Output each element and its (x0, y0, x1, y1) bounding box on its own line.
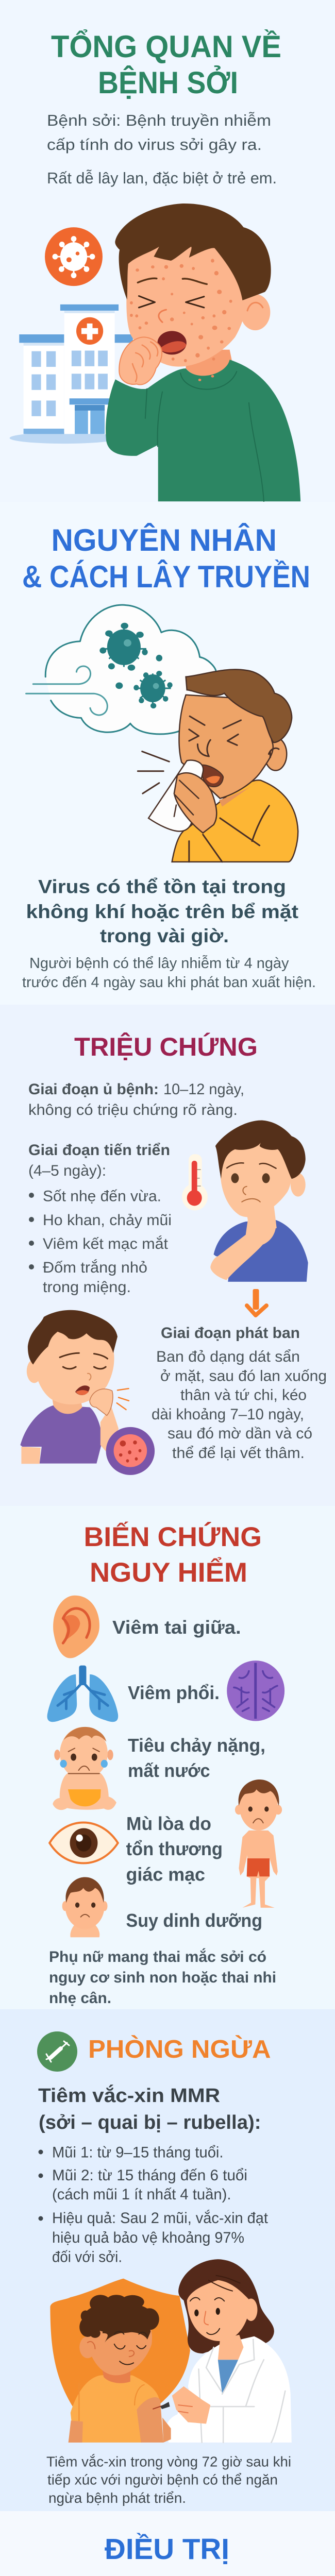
text: contagious period (22, 955, 316, 991)
text: virus survival: không khí hoặc trên bể mặt (26, 901, 298, 922)
text: post-exposure note: Tiêm vắc-xin trong vòng 72 giờ sau khi (46, 2453, 291, 2470)
text: pregnancy note: Phụ nữ mang thai mắc sởi có (49, 1948, 266, 1965)
illustration: boy with sore throat (210, 1121, 308, 1282)
label: diarrhea: Tiêu chảy nặng, (128, 1735, 265, 1756)
text: rash stage: sau đó mờ dần và có (167, 1425, 312, 1442)
text: vaccine heading: (sởi – quai bị – rubella): (39, 2112, 261, 2133)
nurse hand with syringe (153, 2386, 210, 2424)
title: complications: BIẾN CHỨNG (83, 1521, 262, 1552)
icon: ear (53, 1596, 99, 1658)
text: definition: Rất dễ lây lan, đặc biệt ở trẻ em. (47, 169, 277, 187)
icon: crying baby (53, 1727, 116, 1810)
text: incubation stage: 10–12 ngày, (163, 1081, 244, 1098)
illustration: hospital (10, 304, 133, 444)
text: rash stage (152, 1325, 327, 1462)
text: virus survival (26, 876, 298, 946)
boy being vaccinated (69, 2295, 171, 2443)
text: progression stage: Viêm kết mạc mắt (43, 1235, 169, 1252)
text: vaccine heading: Tiêm vắc-xin MMR (38, 2084, 220, 2107)
text: progression stage: Ho khan, chảy mũi (43, 1212, 172, 1229)
text: definition (47, 111, 277, 187)
text: rash stage: Giai đoạn phát ban (161, 1325, 300, 1342)
text: progression stage: trong miệng. (43, 1279, 131, 1296)
label: blindness: giác mạc (126, 1864, 205, 1885)
text: vaccine heading (38, 2084, 261, 2133)
label: pneumonia: Viêm phổi. (128, 1682, 220, 1703)
text: post-exposure note: tiếp xúc với người bệnh có thể ngăn (47, 2472, 278, 2488)
text: vaccine schedule list: hiệu quả bảo vệ khoảng 97% (52, 2229, 244, 2246)
icon: arrow down (247, 1289, 266, 1315)
illustration: coughing boy with rash closeup (20, 1310, 155, 1475)
text: vaccine schedule list: Mũi 1: từ 9–15 tháng tuổi. (52, 2144, 224, 2161)
text: pregnancy note: nhẹ cân. (49, 1990, 111, 2007)
title: complications (83, 1521, 262, 1588)
text: rash stage: thân và tứ chi, kéo (180, 1387, 307, 1403)
text: incubation stage: Giai đoạn ủ bệnh: (28, 1081, 159, 1098)
icon: lungs (47, 1666, 118, 1722)
text: progression stage: Giai đoạn tiến triển (28, 1142, 170, 1159)
panel: complications (47, 1521, 284, 2007)
icon: eye (49, 1822, 118, 1863)
label: diarrhea (128, 1735, 265, 1781)
illustration: coughing boy with rash (106, 204, 300, 501)
panel: overview (9, 29, 301, 502)
label: malnutrition: Suy dinh dưỡng (126, 1910, 262, 1931)
text: vaccine schedule list: Mũi 2: từ 15 tháng đến 6 tuổi (52, 2167, 247, 2184)
title: complications: NGUY HIỂM (90, 1557, 247, 1588)
title: overview (51, 29, 281, 100)
text: virus survival: Virus có thể tồn tại trong (38, 876, 286, 897)
illustration: virus cloud (26, 605, 216, 734)
panel: symptoms (20, 1032, 327, 1475)
text: post-exposure note: ngừa bệnh phát triển. (48, 2490, 186, 2506)
label: otitis: Viêm tai giữa. (112, 1617, 241, 1638)
title: prevention: PHÒNG NGỪA (88, 2035, 271, 2063)
text: progression stage: Sốt nhẹ đến vừa. (43, 1188, 161, 1205)
text: vaccine schedule list: đối với sởi. (52, 2248, 122, 2266)
text: vaccine schedule list: Hiệu quả: Sau 2 mũi, vắc-xin đạt (52, 2210, 269, 2227)
text: progression stage (28, 1142, 172, 1296)
title: overview: TỔNG QUAN VỀ (51, 29, 281, 64)
text: post-exposure note (46, 2453, 291, 2506)
title: causes (22, 523, 310, 594)
text: progression stage: (4–5 ngày): (28, 1162, 106, 1179)
icon: virus badge (45, 227, 103, 286)
text: pregnancy note (49, 1948, 276, 2007)
text: rash stage: thể để lại vết thâm. (172, 1445, 305, 1462)
text: rash stage: ở mặt, sau đó lan xuống (160, 1367, 327, 1385)
title: overview: BỆNH SỞI (98, 65, 238, 100)
text: definition: Bệnh sởi: Bệnh truyền nhiễm (47, 111, 271, 129)
label: diarrhea: mất nước (128, 1760, 210, 1781)
icon: syringe badge (37, 2031, 77, 2072)
label: blindness: tổn thương (126, 1838, 223, 1859)
icon: thermometer (182, 1154, 208, 1210)
text: rash stage: Ban đỏ dạng dát sẩn (156, 1348, 300, 1365)
shield (50, 2279, 190, 2410)
label: blindness: Mù lòa do (126, 1813, 211, 1834)
panel: causes and transmission (22, 523, 316, 991)
text: virus survival: trong vài giờ. (100, 925, 229, 946)
label: blindness (126, 1813, 223, 1885)
icon: sad boy head (62, 1877, 107, 1937)
title: causes: NGUYÊN NHÂN (52, 523, 277, 557)
icon: brain (227, 1660, 284, 1721)
text: incubation stage (28, 1081, 244, 1118)
text: rash stage: dài khoảng 7–10 ngày, (152, 1406, 304, 1423)
text: contagious period: trước đến 4 ngày sau khi phát ban xuất hiện. (22, 974, 316, 991)
text: vaccine schedule list: (cách mũi 1 ít nhất 4 tuần). (52, 2186, 231, 2203)
nurse (166, 2259, 292, 2443)
text: contagious period: Người bệnh có thể lây nhiễm từ 4 ngày (29, 955, 289, 972)
text: vaccine schedule list (38, 2144, 269, 2266)
title: treatment: ĐIỀU TRỊ (105, 2532, 229, 2566)
title: symptoms: TRIỆU CHỨNG (74, 1032, 258, 1061)
illustration: shield and vaccination (50, 2259, 292, 2443)
text: progression stage: Đốm trắng nhỏ (43, 1259, 147, 1276)
illustration: thin boy (235, 1780, 282, 1908)
panel: treatment (105, 2532, 229, 2566)
text: pregnancy note: nguy cơ sinh non hoặc thai nhi (49, 1969, 276, 1986)
illustration: sneezing man with tissue (138, 669, 298, 862)
text: incubation stage: không có triệu chứng rõ ràng. (28, 1101, 238, 1118)
text: definition: cấp tính do virus sởi gây ra. (47, 135, 262, 154)
panel: prevention (0, 2009, 335, 2511)
